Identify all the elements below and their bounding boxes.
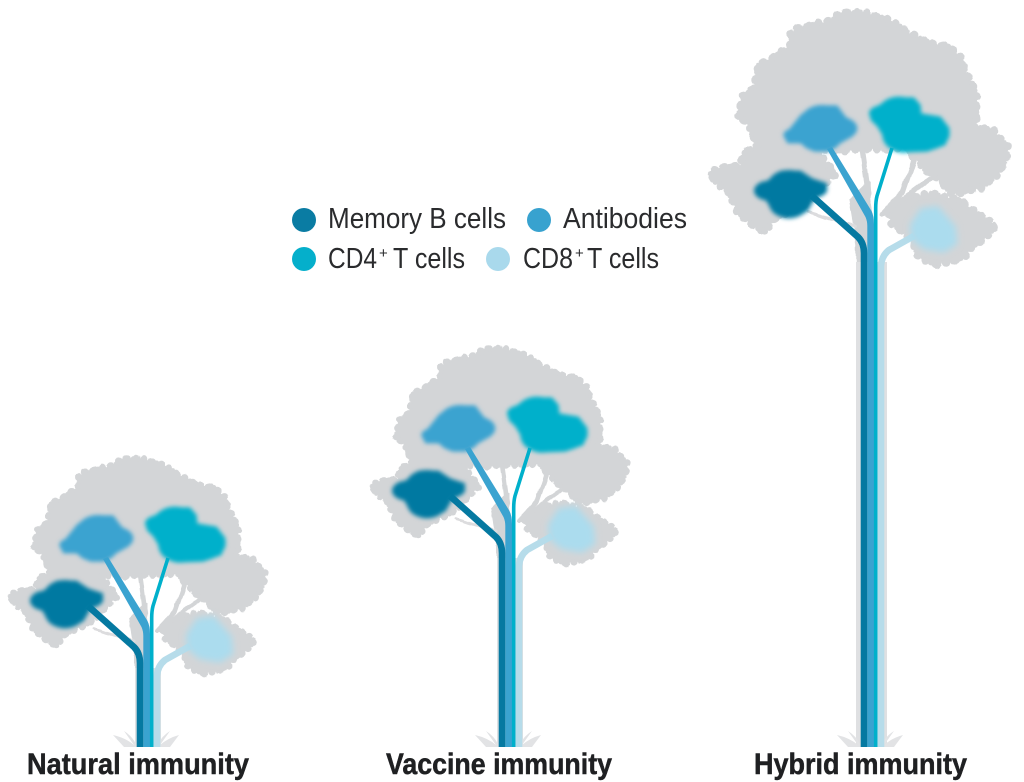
immune cell bands <box>88 557 190 747</box>
legend <box>292 203 687 275</box>
immune cell bands <box>812 147 914 747</box>
legend item: CD8+ T cells: T cells <box>587 243 659 275</box>
cell clusters <box>754 97 957 253</box>
immune cell bands <box>450 447 552 747</box>
cell clusters <box>392 397 595 553</box>
legend item: CD8+ T cells: CD8 <box>523 243 573 275</box>
tree: natural immunity <box>10 458 266 747</box>
label: Natural immunity: Natural immunity <box>27 748 249 781</box>
legend item: Antibodies: Antibodies <box>563 203 687 235</box>
legend item: CD4+ T cells <box>292 243 465 275</box>
cell clusters <box>30 507 233 663</box>
legend item: CD4+ T cells: T cells <box>393 243 465 275</box>
legend item: CD4+ T cells: + <box>379 245 388 262</box>
legend item: CD4+ T cells: CD4 <box>328 243 377 275</box>
tree: vaccine immunity <box>372 348 628 747</box>
gray tree crown and trunk <box>711 11 1009 747</box>
legend item: CD8+ T cells <box>486 243 659 275</box>
gray tree crown and trunk <box>372 348 628 747</box>
gray tree crown and trunk <box>10 458 266 747</box>
label: Vaccine immunity: Vaccine immunity <box>386 748 612 781</box>
legend item: CD8+ T cells: + <box>575 245 584 262</box>
label: Hybrid immunity: Hybrid immunity <box>754 748 967 781</box>
legend item: Memory B cells: Memory B cells <box>328 203 506 235</box>
tree: hybrid immunity <box>711 11 1009 747</box>
